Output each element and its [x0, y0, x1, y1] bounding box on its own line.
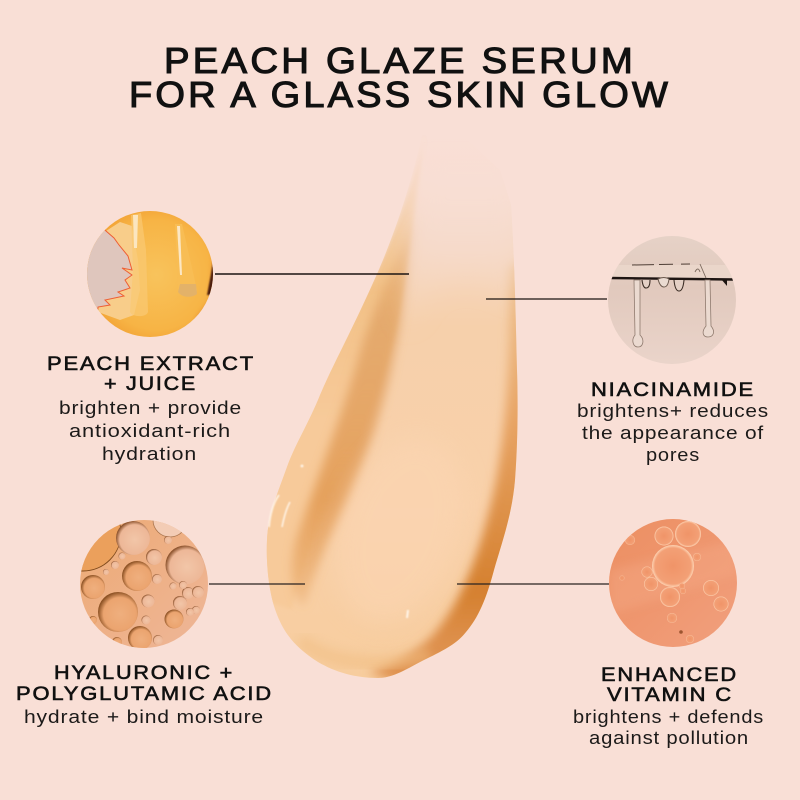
- drip left: [633, 280, 643, 347]
- smear highlights: [269, 465, 408, 618]
- label: enhanced vitamin C: against pollution: [589, 728, 749, 748]
- label: peach extract: brighten + provide: [59, 398, 242, 418]
- label: enhanced vitamin C: brightens + defends: [573, 707, 764, 727]
- label: peach extract: + JUICE: [104, 373, 197, 395]
- label: niacinamide: [577, 379, 769, 465]
- label: hyaluronic + polyglutamic acid: [16, 662, 273, 727]
- icon: vitamin C bubbles circle: [609, 519, 737, 647]
- small hanging drops: [642, 280, 650, 288]
- leader lines: [209, 274, 609, 584]
- label: niacinamide: pores: [646, 445, 700, 465]
- label: hyaluronic + polyglutamic acid: HYALURONIC +: [54, 662, 234, 684]
- label: peach extract: antioxidant-rich: [69, 421, 231, 441]
- label: niacinamide: the appearance of: [582, 423, 764, 443]
- label: niacinamide: NIACINAMIDE: [591, 379, 755, 401]
- peach flesh gap: [87, 230, 133, 310]
- serum smear: [266, 160, 518, 678]
- title: FOR A GLASS SKIN GLOW: [129, 74, 671, 115]
- label: enhanced vitamin C: VITAMIN C: [607, 684, 733, 706]
- icon: hyaluronic bubbles circle: [80, 520, 208, 648]
- label: niacinamide: brightens+ reduces: [577, 401, 769, 421]
- icon: peach extract circle: [87, 211, 213, 337]
- drip right: [703, 280, 714, 337]
- dark surface line: [610, 278, 733, 280]
- label: hyaluronic + polyglutamic acid: hydrate + bind moisture: [24, 707, 264, 727]
- label: enhanced vitamin C: ENHANCED: [601, 664, 738, 686]
- syrup drips: [130, 213, 148, 316]
- label: enhanced vitamin C: [573, 664, 764, 748]
- label: peach extract: [47, 353, 255, 464]
- label: peach extract: hydration: [102, 444, 197, 464]
- icon: niacinamide droplets circle: [608, 236, 736, 364]
- label: hyaluronic + polyglutamic acid: POLYGLUTAMIC ACID: [16, 683, 273, 705]
- title: [129, 40, 671, 115]
- label: peach extract: PEACH EXTRACT: [47, 353, 255, 375]
- peach pale edge: [98, 222, 140, 320]
- top film: [608, 265, 736, 278]
- title: PEACH GLAZE SERUM: [164, 40, 636, 81]
